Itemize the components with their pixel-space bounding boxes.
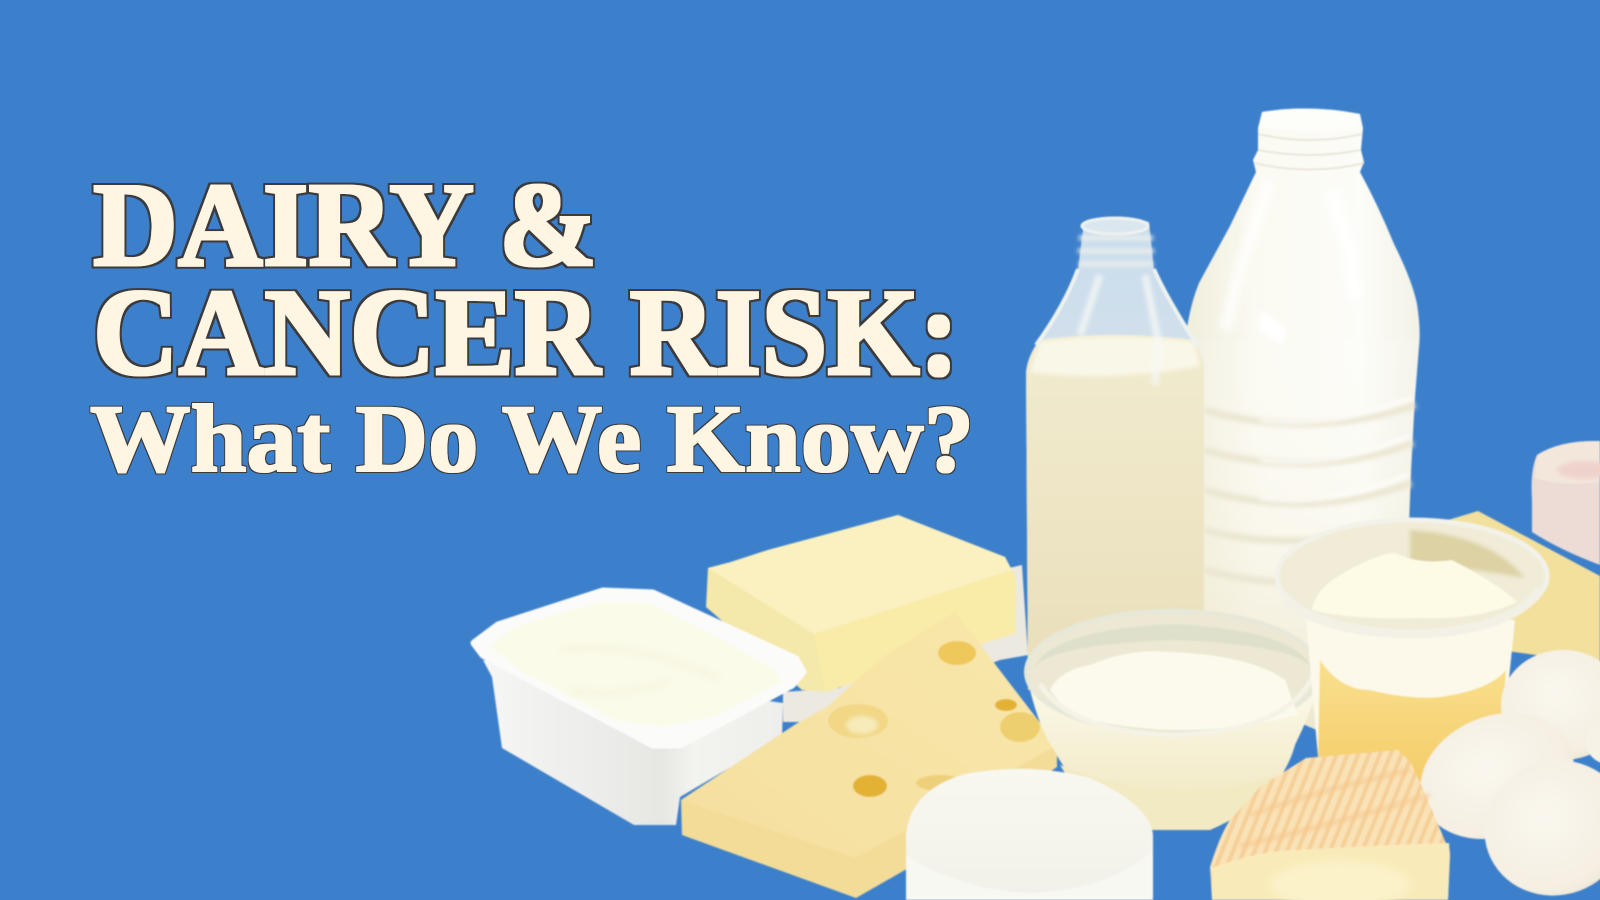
cheese holes	[828, 641, 1040, 797]
white plastic tub of cream	[474, 591, 803, 825]
orange rind cheese	[1210, 750, 1450, 900]
pink yogurt jar	[1532, 441, 1600, 565]
title	[90, 158, 974, 492]
egg back right	[1501, 650, 1600, 760]
title line: DAIRY &: DAIRY &	[93, 158, 597, 291]
subtitle line: What Do We Know?	[90, 385, 974, 492]
small glass milk bottle	[1026, 217, 1204, 690]
egg sliver	[1586, 721, 1600, 765]
title line: CANCER RISK:: CANCER RISK:	[93, 264, 959, 401]
eggs	[1401, 650, 1600, 900]
butter block	[706, 515, 1016, 692]
glass bowl of yogurt	[1026, 611, 1320, 830]
egg front right	[1465, 740, 1600, 900]
white round cheese	[906, 769, 1153, 900]
dairy product photo illustration	[474, 108, 1600, 900]
swiss cheese wedge	[681, 612, 1057, 898]
hard cheese wedge right	[1448, 511, 1600, 664]
plate under butter	[783, 565, 1028, 722]
egg middle	[1401, 691, 1593, 861]
plastic cup of cream and yellow yogurt	[1277, 520, 1547, 790]
big plastic milk bottle	[1187, 108, 1420, 740]
